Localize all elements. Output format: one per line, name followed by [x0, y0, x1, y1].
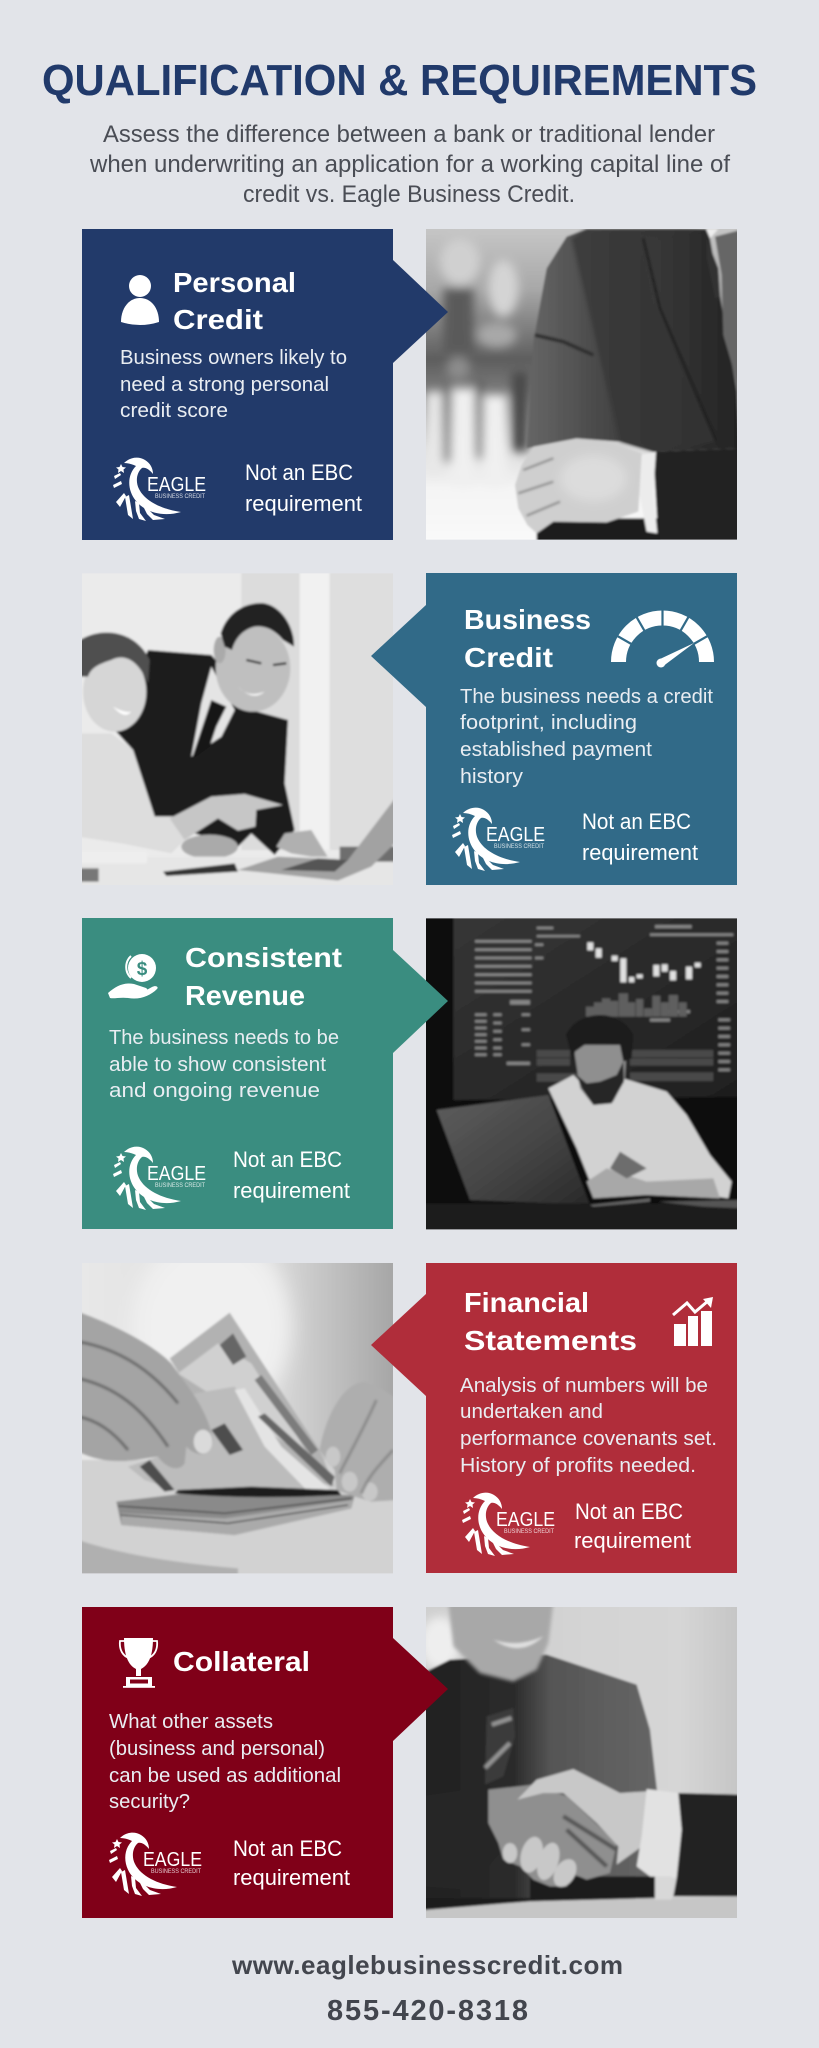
photo: analyst in front of trading screen [420, 915, 743, 1235]
description: business credit: The business needs a credit [460, 685, 713, 708]
description: business credit: established payment [460, 738, 652, 761]
note: not an EBC requirement: Not an EBC [233, 1836, 342, 1861]
note: not an EBC requirement: requirement [233, 1865, 350, 1890]
panel: collateral [82, 1607, 448, 1918]
logo: eagle business credit: BUSINESS CREDIT [494, 843, 544, 850]
logo: eagle business credit: EAGLE [147, 1163, 206, 1185]
heading: consistent revenue: Revenue [185, 980, 305, 1011]
description: consistent revenue: The business needs to be [109, 1026, 339, 1049]
note: not an EBC requirement: requirement [574, 1528, 691, 1553]
description: consistent revenue [109, 1026, 339, 1102]
heading: personal credit: Personal [173, 267, 296, 298]
description: collateral: (business and personal) [109, 1737, 325, 1760]
icon: rising bar chart [673, 1297, 713, 1346]
logo: eagle business credit [113, 458, 206, 521]
intro text: Assess the difference between a bank or traditional lender [103, 121, 715, 148]
note: not an EBC requirement [233, 1147, 350, 1203]
logo: eagle business credit [452, 808, 545, 871]
icon: hand holding coin: $ [137, 959, 148, 980]
photo: business handshake [420, 1603, 743, 1923]
note: not an EBC requirement: requirement [233, 1178, 350, 1203]
description: consistent revenue: and ongoing revenue [109, 1079, 320, 1102]
description: financial statements: Analysis of numbers will be [460, 1374, 708, 1397]
icon: trophy [120, 1638, 157, 1688]
logo: eagle business credit: BUSINESS CREDIT [504, 1528, 554, 1535]
description: collateral: What other assets [109, 1710, 273, 1733]
logo: eagle business credit [113, 1147, 206, 1210]
icon: person [121, 275, 159, 325]
footer: website and phone: 855-420-8318 [327, 1995, 528, 2027]
logo: eagle business credit: EAGLE [143, 1849, 202, 1871]
heading: consistent revenue: Consistent [185, 942, 342, 973]
note: not an EBC requirement: Not an EBC [582, 809, 691, 834]
description: personal credit [120, 346, 347, 422]
description: personal credit: Business owners likely to [120, 346, 347, 369]
note: not an EBC requirement: requirement [582, 840, 698, 865]
heading: financial statements: Statements [464, 1325, 637, 1356]
description: personal credit: need a strong personal [120, 373, 329, 396]
heading: business credit: Business [464, 604, 591, 635]
icon: hand holding coin [108, 954, 158, 999]
heading: personal credit [173, 267, 296, 335]
heading: collateral: Collateral [173, 1646, 310, 1677]
description: personal credit: credit score [120, 399, 228, 422]
photo: businessman with folded arms [420, 225, 743, 545]
panel: business credit [371, 573, 737, 885]
icon: speedometer gauge [616, 608, 709, 668]
description: financial statements: performance covenants set. [460, 1427, 717, 1450]
photo: hands counting banknotes [82, 1263, 393, 1574]
note: not an EBC requirement [233, 1836, 350, 1890]
description: financial statements [460, 1374, 717, 1477]
panel: consistent revenue [82, 918, 448, 1229]
heading: personal credit: Credit [173, 304, 263, 335]
heading: business credit [464, 604, 591, 673]
intro text: credit vs. Eagle Business Credit. [243, 181, 575, 208]
heading: business credit: Credit [464, 642, 553, 673]
logo: eagle business credit: EAGLE [147, 474, 206, 496]
note: not an EBC requirement [245, 460, 362, 516]
description: collateral [109, 1710, 341, 1813]
description: collateral: security? [109, 1790, 190, 1813]
description: consistent revenue: able to show consistent [109, 1053, 326, 1076]
note: not an EBC requirement: requirement [245, 491, 362, 516]
logo: eagle business credit: EAGLE [496, 1509, 555, 1531]
description: business credit: footprint, including [460, 711, 637, 734]
note: not an EBC requirement: Not an EBC [233, 1147, 342, 1172]
heading: financial statements: Financial [464, 1287, 589, 1318]
footer: website and phone [231, 1950, 623, 2027]
title: QUALIFICATION & REQUIREMENTS [42, 56, 757, 105]
logo: eagle business credit: BUSINESS CREDIT [155, 493, 205, 500]
footer: website and phone: www.eaglebusinesscredit.com [231, 1950, 623, 1980]
photo: two colleagues at a laptop [78, 570, 398, 890]
logo: eagle business credit: BUSINESS CREDIT [151, 1868, 201, 1875]
note: not an EBC requirement [582, 809, 698, 865]
logo: eagle business credit: EAGLE [486, 824, 545, 846]
heading: consistent revenue [185, 942, 342, 1011]
description: financial statements: History of profits needed. [460, 1454, 696, 1477]
note: not an EBC requirement: Not an EBC [575, 1499, 683, 1524]
panel: personal credit [82, 229, 448, 540]
description: business credit [460, 685, 713, 788]
logo: eagle business credit [109, 1833, 202, 1896]
logo: eagle business credit [462, 1493, 555, 1556]
description: financial statements: undertaken and [460, 1400, 603, 1423]
logo: eagle business credit: BUSINESS CREDIT [155, 1182, 205, 1189]
description: business credit: history [460, 765, 524, 788]
description: collateral: can be used as additional [109, 1764, 341, 1787]
intro text [89, 121, 730, 208]
intro text: when underwriting an application for a working capital line of [89, 151, 730, 178]
panel: financial statements [371, 1263, 737, 1573]
note: not an EBC requirement [574, 1499, 691, 1553]
heading: financial statements [464, 1287, 637, 1356]
note: not an EBC requirement: Not an EBC [245, 460, 353, 485]
